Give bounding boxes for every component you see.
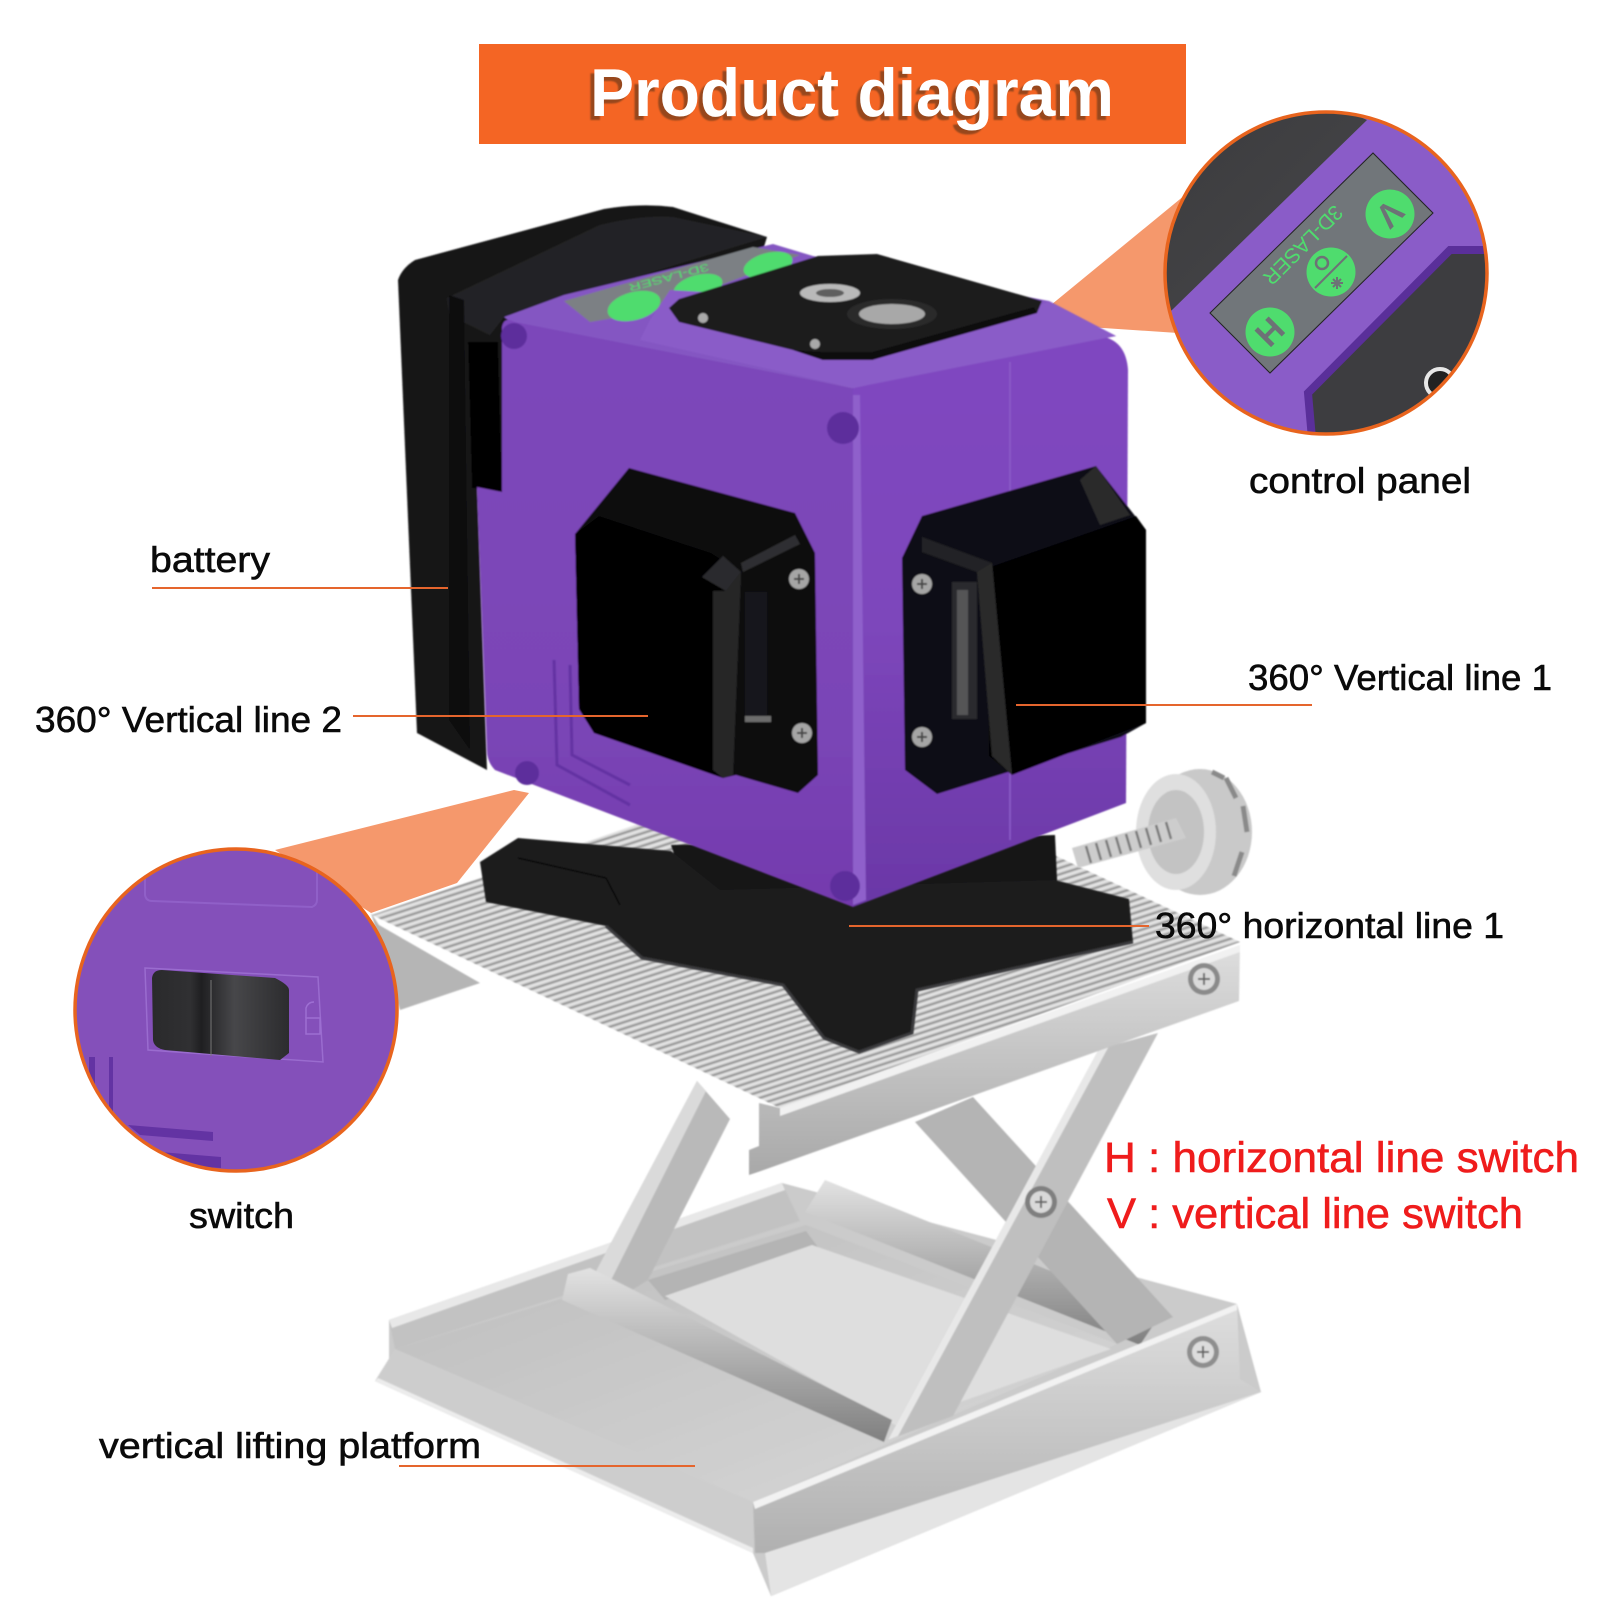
device: screw holes [501, 323, 860, 901]
platform: top side face [749, 945, 1240, 1175]
platform: screw upper [1188, 963, 1220, 995]
label: 360 horizontal line 1: 360° horizontal line 1 [1155, 905, 1504, 946]
label: 360 vertical line 1: 360° Vertical line 1 [1248, 657, 1552, 698]
title banner [479, 44, 1186, 144]
device: laser window left [575, 468, 818, 793]
callout: switch circle [70, 845, 402, 1175]
device: corner highlight [853, 395, 866, 905]
control panel: button power [1306, 248, 1356, 296]
switch: slider [152, 970, 289, 1060]
label: control panel: control panel [1249, 460, 1471, 501]
control panel: screw ring [1426, 369, 1454, 397]
device: top plate pad [640, 290, 1116, 388]
device: control strip [564, 247, 800, 327]
control panel: label plate [1210, 153, 1433, 373]
note: H horizontal line switch: H : horizontal line switch [1104, 1134, 1579, 1182]
platform: screw middle [1025, 1186, 1057, 1218]
lifting platform [371, 755, 1261, 1596]
note: V vertical line switch: V : vertical line switch [1107, 1190, 1523, 1238]
platform: back rod [805, 1180, 1160, 1345]
callout wedge: control panel [1029, 195, 1185, 333]
adjusting knob and bolt [1072, 769, 1252, 895]
device: left face [477, 320, 853, 907]
platform: front rod [562, 1268, 892, 1442]
switch: lock icon [306, 1002, 320, 1034]
switch: upper recess [144, 872, 318, 908]
platform: scissor arm left [586, 1081, 730, 1310]
base mount [480, 835, 1133, 1052]
platform: base pan [375, 1183, 1261, 1596]
platform: scissor arm rear [915, 1097, 1173, 1344]
label: vertical lifting platform: vertical lifting platform [99, 1425, 481, 1466]
control panel: dark pad [1304, 246, 1486, 432]
platform: scissor arm front [888, 1033, 1158, 1440]
label: 360 vertical line 2: 360° Vertical line 2 [35, 699, 342, 740]
device: black top plate [669, 254, 1042, 360]
title banner: Product diagram [586, 59, 1110, 135]
device: top face [504, 244, 1116, 388]
device: battery [398, 205, 767, 770]
device: control strip: 3D-LASER [628, 261, 710, 294]
device: right face [853, 336, 1128, 907]
switch: embossed marks [89, 1057, 221, 1168]
device: laser window right [902, 466, 1146, 794]
control panel: dark housing [1166, 114, 1367, 310]
platform: ribbed top [372, 755, 1240, 1108]
laser level device [398, 205, 1146, 907]
label: battery: battery [150, 539, 270, 580]
control panel: 3D-LASER text: 3D-LASER [1258, 200, 1347, 289]
title banner: Product diagram [590, 55, 1114, 131]
callout wedge: switch [275, 790, 529, 913]
callout: control panel circle [1163, 110, 1489, 436]
platform: base front wall [753, 1304, 1261, 1596]
label: switch: switch [189, 1195, 294, 1236]
switch: slider recess [145, 968, 323, 1062]
device: seam [1009, 362, 1011, 840]
device: embossed marks [554, 660, 630, 805]
control panel: button V: V [1368, 192, 1411, 235]
control panel: button H: H [1247, 309, 1291, 353]
platform: underside bar [371, 913, 480, 1010]
platform: screw lower [1187, 1336, 1219, 1368]
